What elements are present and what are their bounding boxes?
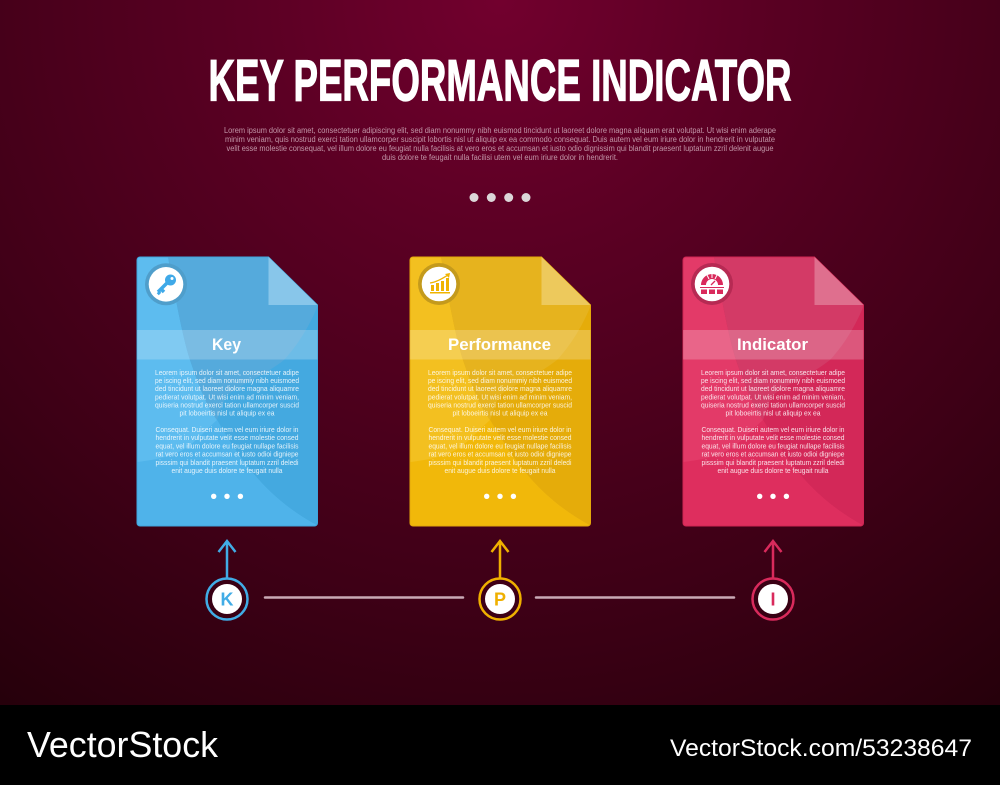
body text: Leorem ipsum dolor sit amet, consectetuer adipe: [155, 368, 299, 377]
intro text: Lorem ipsum dolor sit amet, consectetuer adipiscing elit, sed diam nonummy nibh euismod tincidunt ut laoreet dolore magna aliquam erat volutpat. Ut wisi enim aderape: [224, 126, 777, 135]
heading: Key: [212, 335, 242, 354]
body text: [428, 368, 572, 475]
body text: Consequat. Duiseri autem vel eum iriure dolor in: [428, 425, 572, 434]
body text: quiseria nostrud exerci tation ullamcorper suscid: [155, 400, 299, 410]
arrow: K: [218, 541, 236, 578]
icon: gauge: [691, 263, 733, 305]
three dots: [757, 494, 789, 499]
panel: Indicator: [683, 257, 864, 526]
body text: pedierat volutpat. Ut wisi enim ad minim veniam,: [428, 392, 572, 402]
body text: enit augue duis dolore te feugait nulla: [444, 466, 556, 475]
panel: Performance: [410, 257, 591, 526]
body text: rat vero eros et accumsan et iusto odioi digniepe: [428, 450, 572, 458]
body text: quiseria nostrud exerci tation ullamcorper suscid: [428, 400, 572, 410]
arrow: P: [492, 541, 508, 578]
connector: K to P: [265, 596, 463, 599]
panel: Key: [137, 257, 318, 526]
folded corner: [542, 257, 590, 305]
three dots: [484, 494, 516, 499]
body text: pit loboeirtis nisl ut aliquip ex ea: [180, 408, 274, 418]
heading band: [410, 330, 590, 360]
body text: pisssim qui blandit praesent luptatum zzril deledi: [428, 458, 572, 467]
footer bar: [0, 705, 1000, 785]
body text: pit loboeirtis nisl ut aliquip ex ea: [726, 408, 820, 418]
body text: enit augue duis dolore te feugait nulla: [718, 466, 828, 475]
connector: P to I: [536, 596, 734, 599]
body text: equat, vel illum dolore eu feugiat nullape facilisis: [156, 442, 299, 450]
icon: key: [145, 263, 187, 305]
body text: ded tincidunt ut laoreet diolore magna aliquamre: [155, 384, 299, 393]
body text: [155, 368, 299, 475]
body text: rat vero eros et accumsan et iusto odioi digniepe: [702, 450, 844, 458]
intro text: minim veniam, quis nostrud exerci tation ullamcorper suscipit lobortis nisl ut aliquip ex ea commodo consequat. Duis autem vel eum iriure dolor in hendrerit in vulputate: [225, 135, 776, 144]
body text: pedierat volutpat. Ut wisi enim ad minim veniam,: [701, 392, 845, 402]
folded corner: [268, 257, 318, 305]
body text: quiseria nostrud exerci tation ullamcorper suscid: [701, 400, 845, 410]
body text: pe iscing elit, sed diam nonummiy nibh euismoed: [428, 376, 572, 385]
badge: I: [752, 578, 794, 620]
body text: enit augue duis dolore te feugait nulla: [172, 466, 282, 475]
arrow: I: [764, 541, 782, 578]
heading band: [683, 330, 864, 360]
body text: [701, 368, 845, 475]
body text: Consequat. Duiseri autem vel eum iriure dolor in: [702, 425, 844, 434]
body text: rat vero eros et accumsan et iusto odioi digniepe: [156, 450, 298, 458]
body text: ded tincidunt ut laoreet diolore magna aliquamre: [701, 384, 845, 393]
badge: K: [206, 578, 248, 620]
body text: Leorem ipsum dolor sit amet, consectetuer adipe: [428, 368, 572, 377]
body text: hendrerit in vulputate velit esse molestie consed: [702, 433, 844, 442]
body text: hendrerit in vulputate velit esse molestie consed: [428, 433, 572, 442]
badge: I: I: [770, 590, 776, 610]
heading: Performance: [448, 335, 551, 354]
folded corner: [814, 257, 864, 305]
three dots: [211, 494, 243, 499]
footer logo: VectorStock: [27, 724, 219, 765]
intro text: velit esse molestie consequat, vel illum dolore eu feugiat nulla facilisis at vero eros et accumsan et iusto odio dignissim qui blandit praesent luptatum zzril delenit augue: [226, 144, 774, 153]
badge: P: P: [494, 590, 506, 610]
intro text: [224, 126, 777, 162]
intro text: duis dolore te feugait nulla facilisi utem vel eum iriure dolor in hendrerit.: [382, 153, 618, 162]
badge: K: K: [220, 590, 234, 610]
body text: pe iscing elit, sed diam nonummiy nibh euismoed: [701, 376, 845, 385]
heading: Indicator: [737, 335, 808, 354]
body text: equat, vel illum dolore eu feugiat nullape facilisis: [702, 442, 845, 450]
badge: P: [480, 578, 520, 620]
body text: hendrerit in vulputate velit esse molestie consed: [156, 433, 298, 442]
body text: pedierat volutpat. Ut wisi enim ad minim veniam,: [155, 392, 299, 402]
body text: Leorem ipsum dolor sit amet, consectetuer adipe: [701, 368, 845, 377]
body text: pisssim qui blandit praesent luptatum zzril deledi: [156, 458, 299, 467]
icon: growth chart: [418, 263, 460, 305]
body text: pisssim qui blandit praesent luptatum zzril deledi: [702, 458, 845, 467]
body text: Consequat. Duiseri autem vel eum iriure dolor in: [156, 425, 298, 434]
body text: ded tincidunt ut laoreet diolore magna aliquamre: [428, 384, 572, 393]
heading band: [137, 330, 318, 360]
footer url: VectorStock.com/53238647: [670, 735, 972, 762]
body text: pit loboeirtis nisl ut aliquip ex ea: [452, 408, 548, 418]
four dots: [470, 193, 530, 202]
body text: equat, vel illum dolore eu feugiat nullape facilisis: [428, 442, 572, 450]
body text: pe iscing elit, sed diam nonummiy nibh euismoed: [155, 376, 299, 385]
